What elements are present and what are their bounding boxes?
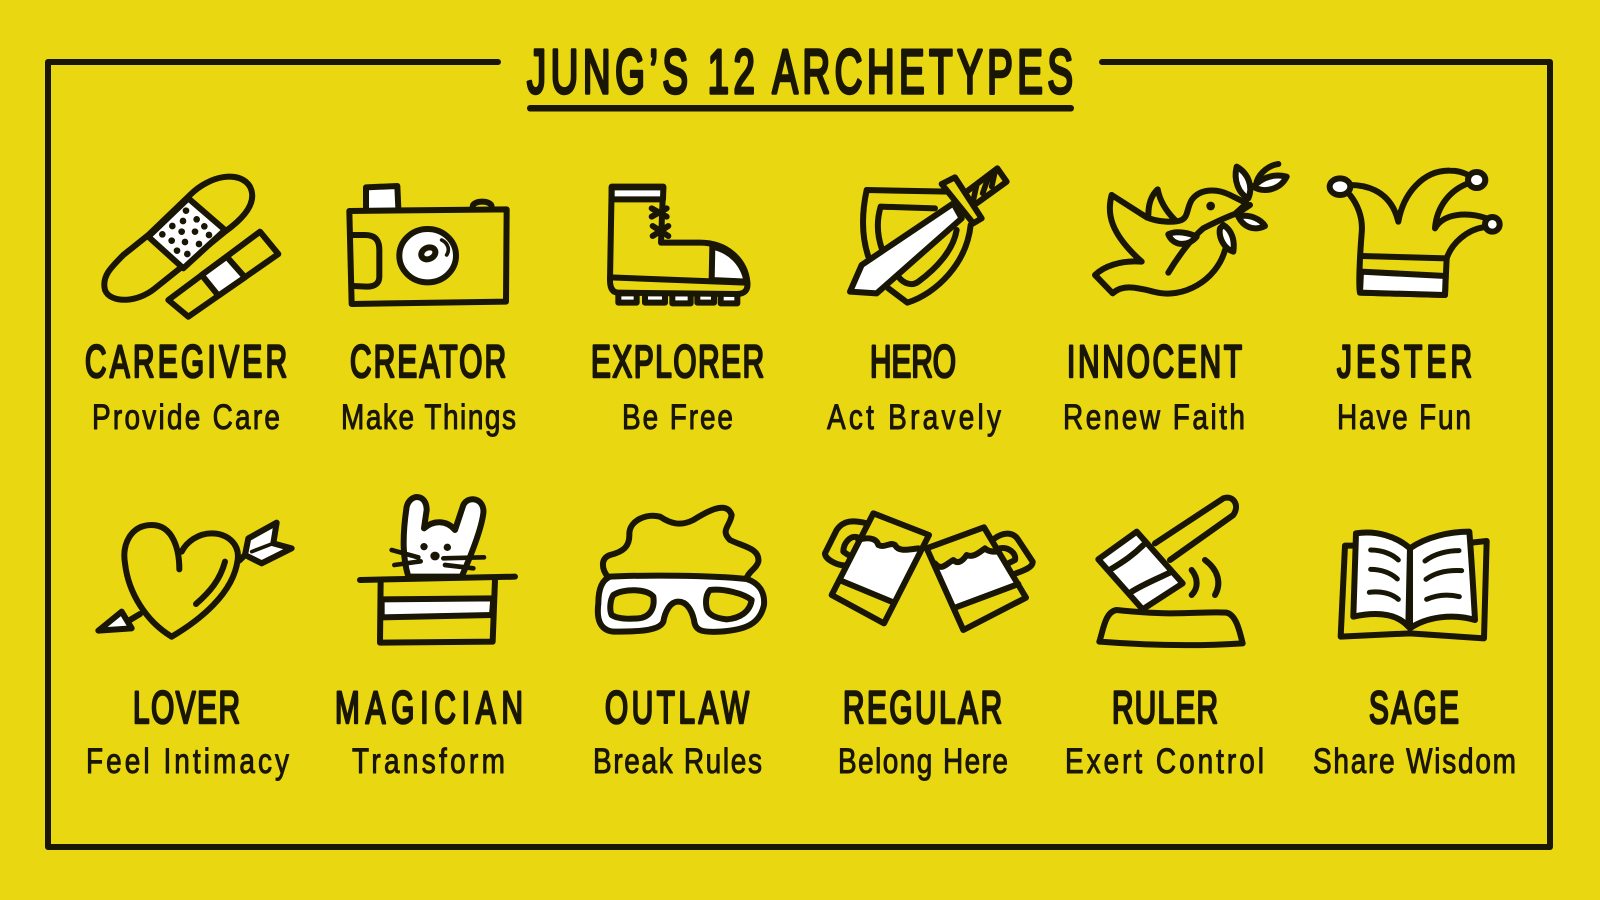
tagline: explorer: Be Free: [622, 397, 733, 437]
panel: jester: [1330, 171, 1500, 437]
name: regular: REGULAR: [843, 683, 1002, 734]
tagline: creator: Make Things: [341, 397, 516, 437]
panel: magician: [335, 497, 523, 781]
icon: heart and arrow: [98, 523, 292, 637]
panel: ruler: [1065, 498, 1264, 781]
icon: camera: [349, 186, 507, 304]
icon: gavel: [1098, 498, 1243, 645]
icon: bandit mask: [598, 508, 764, 632]
panel: explorer: [591, 187, 764, 437]
name: sage: SAGE: [1369, 683, 1459, 734]
icon: open book: [1341, 532, 1487, 638]
icon: rabbit in hat: [360, 497, 515, 643]
tagline: ruler: Exert Control: [1065, 741, 1264, 781]
name: creator: CREATOR: [350, 337, 506, 388]
tagline: sage: Share Wisdom: [1313, 741, 1516, 781]
tagline: caregiver: Provide Care: [92, 397, 280, 437]
name: explorer: EXPLORER: [591, 337, 764, 388]
panel: creator: [341, 186, 516, 437]
name: magician: MAGICIAN: [335, 683, 523, 734]
tagline: outlaw: Break Rules: [593, 741, 762, 781]
icon: dove with olive branch: [1095, 164, 1287, 294]
icon: beer mugs: [825, 513, 1033, 630]
name: hero: HERO: [870, 337, 956, 388]
tagline: regular: Belong Here: [838, 741, 1008, 781]
panel: caregiver: [85, 177, 287, 437]
tagline: hero: Act Bravely: [827, 397, 1001, 437]
panel: lover: [86, 523, 292, 781]
name: lover: LOVER: [133, 683, 240, 734]
panel: regular: [825, 513, 1033, 781]
name: outlaw: OUTLAW: [605, 683, 749, 734]
panel: sage: [1313, 532, 1516, 781]
title: JUNG’S 12 ARCHETYPES: [527, 37, 1073, 106]
name: ruler: RULER: [1112, 683, 1218, 734]
panel: innocent: [1063, 164, 1287, 437]
tagline: innocent: Renew Faith: [1063, 397, 1245, 437]
panel: outlaw: [593, 508, 764, 781]
name: innocent: INNOCENT: [1067, 337, 1242, 388]
panel: hero: [827, 168, 1007, 437]
tagline: jester: Have Fun: [1337, 397, 1471, 437]
name: jester: JESTER: [1337, 337, 1472, 388]
icon: jester hat: [1330, 171, 1500, 295]
tagline: lover: Feel Intimacy: [86, 741, 289, 781]
icon: boot: [610, 187, 748, 303]
tagline: magician: Transform: [352, 741, 505, 781]
name: caregiver: CAREGIVER: [85, 337, 287, 388]
icon: shield and sword: [850, 168, 1007, 303]
icon: bandages: [104, 177, 278, 317]
